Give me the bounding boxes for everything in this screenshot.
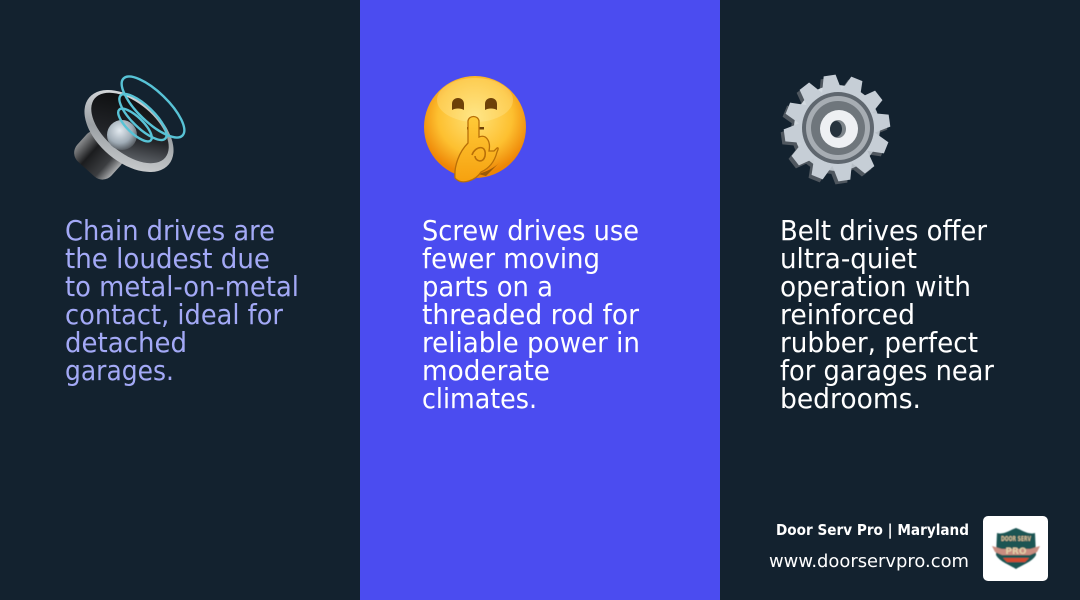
text: screw drives description: Screw drives use — [422, 215, 639, 247]
text: belt drives description: rubber, perfect — [780, 327, 978, 359]
logo: Door Serv Pro badge — [983, 516, 1048, 581]
text: belt drives description: bedrooms. — [780, 383, 921, 415]
text: belt drives description: operation with — [780, 271, 971, 303]
icon: metal gear — [780, 74, 891, 185]
panel: belt drives — [720, 0, 1080, 600]
footer: brand and website — [769, 516, 1048, 581]
text: screw drives description: parts on a — [422, 271, 553, 303]
text: screw drives description: threaded rod for — [422, 299, 640, 331]
icon: loudspeaker with sound waves — [69, 68, 193, 188]
panel: chain drives — [0, 0, 360, 600]
website address: www.doorservpro.com — [769, 551, 969, 572]
text: chain drives description: to metal-on-metal — [65, 271, 299, 303]
text: chain drives description: Chain drives are — [65, 215, 275, 247]
text: belt drives description: ultra-quiet — [780, 243, 917, 275]
brand name: Door Serv Pro | Maryland — [776, 521, 969, 540]
text: belt drives description: reinforced — [780, 299, 915, 331]
text: chain drives description: garages. — [65, 355, 174, 387]
text: screw drives description: moderate — [422, 355, 550, 387]
text: screw drives description: reliable power in — [422, 327, 640, 359]
text: belt drives description: for garages near — [780, 355, 995, 387]
text: screw drives description: climates. — [422, 383, 537, 415]
logo: Door Serv Pro badge: DOOR SERV — [1001, 535, 1031, 543]
panel: screw drives — [360, 0, 720, 600]
text: chain drives description: detached — [65, 327, 187, 359]
text: chain drives description: the loudest due — [65, 243, 270, 275]
icon: shushing face emoji — [424, 76, 526, 182]
text: screw drives description: fewer moving — [422, 243, 600, 275]
logo: Door Serv Pro badge: PRO — [1005, 547, 1027, 557]
text: belt drives description: Belt drives offer — [780, 215, 988, 247]
text: chain drives description: contact, ideal for — [65, 299, 284, 331]
